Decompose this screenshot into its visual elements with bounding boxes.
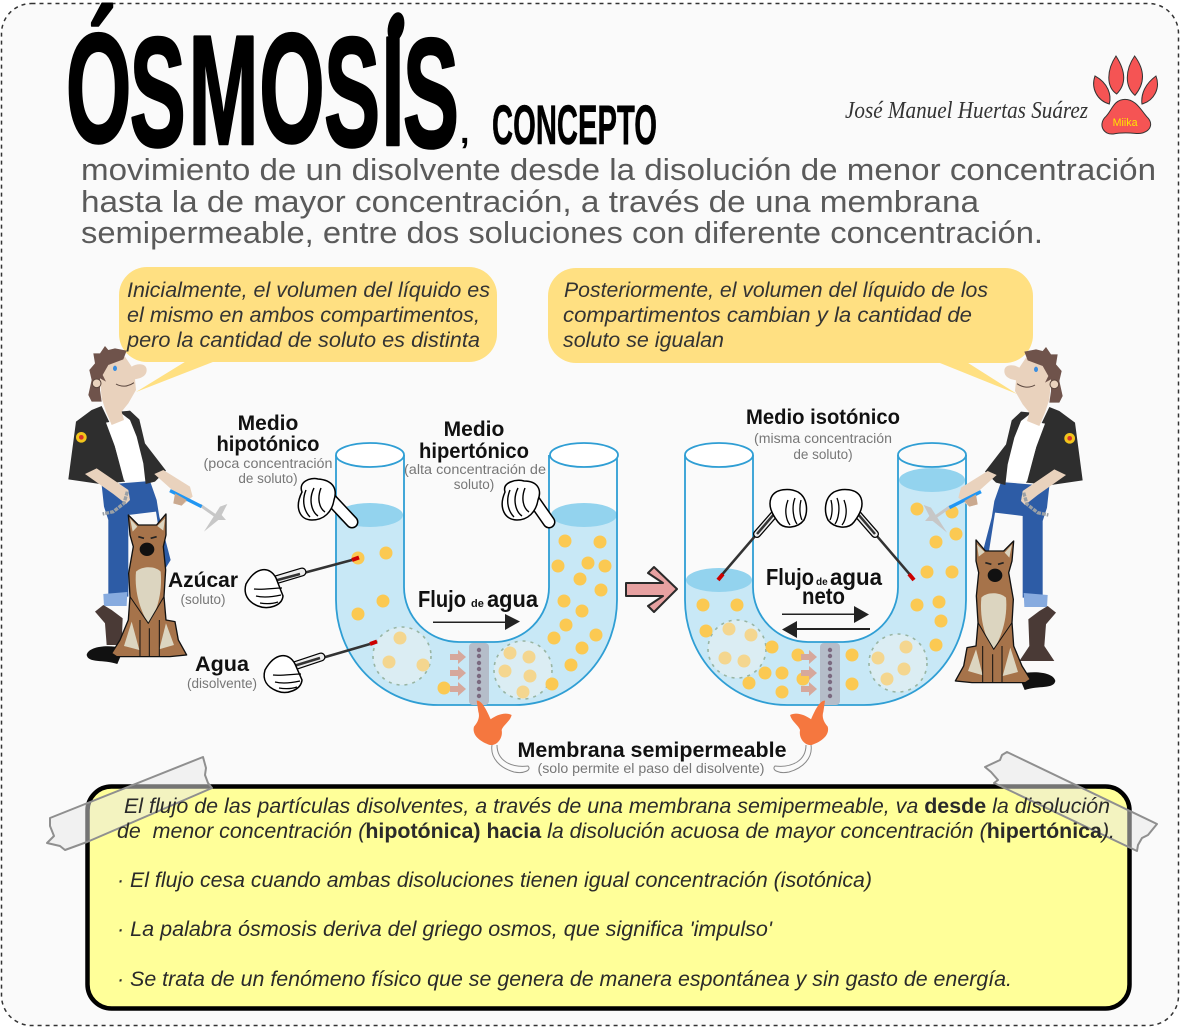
left U-tube: hypotonic vs hypertonic (336, 443, 618, 705)
chest (136, 567, 161, 623)
title: , (460, 113, 469, 151)
neck and head (1004, 358, 1051, 426)
label: water: Agua (195, 653, 249, 676)
heading: water flow left: Flujo (418, 586, 466, 612)
summary text: · El flujo cesa cuando ambas disoluciones tienen igual concentración (isotónica) (117, 869, 872, 892)
neck and head (100, 357, 147, 425)
speech bubble: left (119, 267, 497, 392)
arrows: net flow both directions (782, 606, 870, 638)
character: man with hammer, right (924, 347, 1083, 661)
title: ÓSMOSIS (66, 1, 459, 181)
legs (102, 481, 171, 597)
label: semipermeable membrane: Membrana semipermeable (518, 739, 786, 762)
label: isotonic medium (746, 406, 900, 462)
summary text: · La palabra ósmosis deriva del griego osmos, que significa 'impulso' (117, 918, 773, 941)
nose (140, 543, 154, 556)
speech bubble: left: Inicialmente, el volumen del líquido es (127, 279, 491, 302)
body (955, 540, 1030, 683)
cuff (103, 592, 127, 606)
label: isotonic medium: Medio isotónico (746, 406, 900, 429)
jacket right side (985, 412, 1032, 485)
heading: net water flow: de (816, 577, 828, 588)
arrow: water flow left (433, 614, 520, 630)
tail (87, 646, 124, 664)
heading: net water flow: Flujo (766, 564, 814, 590)
icon: glove with probe pointing at solute (245, 558, 359, 608)
mouth (1017, 384, 1035, 387)
membrane (820, 643, 840, 705)
summary text (117, 795, 1115, 991)
label: water (187, 653, 257, 691)
glass (336, 443, 618, 705)
label: hypotonic medium (204, 412, 332, 486)
haunches (124, 622, 174, 650)
membrane (469, 643, 489, 705)
speech bubble: right (548, 268, 1033, 394)
definition text: movimiento de un disolvente desde la disolución de menor concentración (81, 152, 1156, 187)
label: hypotonic medium: (poca concentración (204, 456, 332, 471)
jacket (1026, 407, 1083, 485)
title (66, 1, 657, 181)
label: hypotonic medium: Medio (238, 412, 298, 435)
icon: glove with probe pointing at water (264, 642, 377, 692)
hammer (924, 492, 981, 533)
haunches (968, 648, 1018, 676)
label: semipermeable membrane (518, 739, 786, 776)
badge (1064, 433, 1075, 444)
tail (1018, 672, 1055, 690)
definition text: semipermeable, entre dos soluciones con diferente concentración. (81, 215, 1043, 250)
definition text (81, 152, 1156, 250)
eye (113, 366, 117, 371)
label: isotonic medium: (misma concentración (754, 431, 892, 446)
icon: orange hand pointing at left membrane (474, 701, 512, 745)
arms (85, 468, 193, 506)
label: sugar: Azúcar (168, 569, 238, 592)
icon: glove with tweezers at right level (826, 490, 914, 580)
summary text: · Se trata de un fenómeno físico que se genera de manera espontánea y sin gasto de energía. (117, 968, 1012, 991)
icon: red paw logo (1094, 56, 1157, 134)
label: sugar (168, 569, 238, 607)
label: hypertonic medium (404, 418, 546, 492)
eyes (985, 563, 1004, 564)
chain (103, 492, 127, 514)
right U-tube: isotonic (685, 443, 966, 705)
label: isotonic medium: de soluto) (793, 447, 853, 462)
chain (1024, 493, 1048, 515)
boot (1019, 606, 1056, 661)
speech bubble: right: Posteriormente, el volumen del líquido de los (564, 279, 988, 302)
water flow arrows (801, 650, 817, 696)
label: semipermeable membrane: (solo permite el paso del disolvente) (538, 761, 764, 776)
heading: water flow left: agua (487, 586, 538, 612)
body (112, 514, 187, 657)
character: man with hammer, left (68, 346, 227, 645)
boot (95, 605, 123, 645)
cuff (1024, 593, 1048, 607)
definition text: hasta la de mayor concentración, a través de una membrana (81, 184, 980, 219)
ear (1050, 380, 1059, 389)
nose (988, 569, 1002, 582)
solute zoom circles (373, 627, 552, 699)
hair (1024, 347, 1063, 403)
heading: net water flow: agua (830, 564, 882, 590)
ears (977, 544, 1012, 558)
water flow arrows (450, 650, 466, 696)
panel: yellow summary note (88, 786, 1130, 1008)
icon: glove pointing at right water level (502, 480, 549, 522)
icon: orange hand pointing at right membrane (790, 701, 828, 745)
legs (130, 597, 164, 656)
chest (981, 593, 1006, 649)
glass (685, 443, 966, 705)
speech bubble: right: compartimentos cambian y la cantidad de (563, 304, 972, 327)
hair (88, 346, 127, 402)
jacket right side (119, 411, 166, 484)
badge (76, 432, 87, 443)
label: hypotonic medium: hipotónico (216, 433, 320, 456)
speech bubble: left: el mismo en ambos compartimentos, (127, 304, 480, 327)
t-shirt (106, 418, 146, 481)
eye (1034, 367, 1038, 372)
label: hypertonic medium: hipertónico (419, 440, 529, 463)
decorative connector curves (492, 745, 811, 773)
water (336, 515, 617, 705)
pale particles (718, 622, 912, 686)
label: hypertonic medium: soluto) (454, 477, 494, 492)
mouth (116, 383, 134, 386)
solute particles (352, 534, 612, 694)
icon: glove with tweezers at left level (718, 490, 806, 580)
ears (130, 518, 165, 532)
arrow: left to right transition (626, 567, 677, 612)
legs (978, 623, 1012, 682)
icon: glove pointing at left water level (298, 479, 352, 522)
title: CONCEPTO (492, 93, 657, 156)
character: German shepherd dog, left (87, 514, 187, 664)
character: German shepherd dog, right (955, 540, 1055, 690)
summary text: El flujo de las partículas disolventes, a través de una membrana semipermeable, va desde la disolución (124, 795, 1110, 818)
label: hypertonic medium: Medio (444, 418, 504, 441)
legs (980, 482, 1049, 598)
arms (958, 469, 1066, 507)
speech bubble: right: soluto se igualan (563, 329, 724, 352)
icon: red paw logo: Miika (1113, 117, 1138, 129)
pale particles (382, 632, 536, 698)
hammer (170, 491, 227, 532)
solute zoom circles (708, 620, 927, 692)
speech bubble: left: pero la cantidad de soluto es distinta (126, 329, 480, 352)
jacket (68, 406, 125, 484)
tape: top-right corner (985, 752, 1157, 851)
tape: top-left corner (47, 757, 212, 850)
label: water: (disolvente) (187, 676, 257, 691)
heading: net water flow: neto (802, 583, 845, 609)
water (685, 480, 966, 705)
water surface (337, 503, 617, 527)
heading: net water flow (766, 564, 882, 609)
heading: water flow left (418, 586, 538, 612)
eyes (138, 537, 157, 538)
ear (92, 379, 101, 388)
water surface (686, 468, 965, 592)
heading: water flow left: de (471, 598, 484, 610)
solute particles (696, 502, 962, 698)
author signature: José Manuel Huertas Suárez (845, 98, 1089, 124)
t-shirt (1005, 419, 1045, 482)
label: hypotonic medium: de soluto) (238, 471, 298, 486)
label: sugar: (soluto) (180, 592, 226, 607)
summary text: de menor concentración (hipotónica) hacia la disolución acuosa de mayor concentración ( hipertónica). (117, 820, 1115, 843)
label: hypertonic medium: (alta concentración de (404, 462, 546, 477)
